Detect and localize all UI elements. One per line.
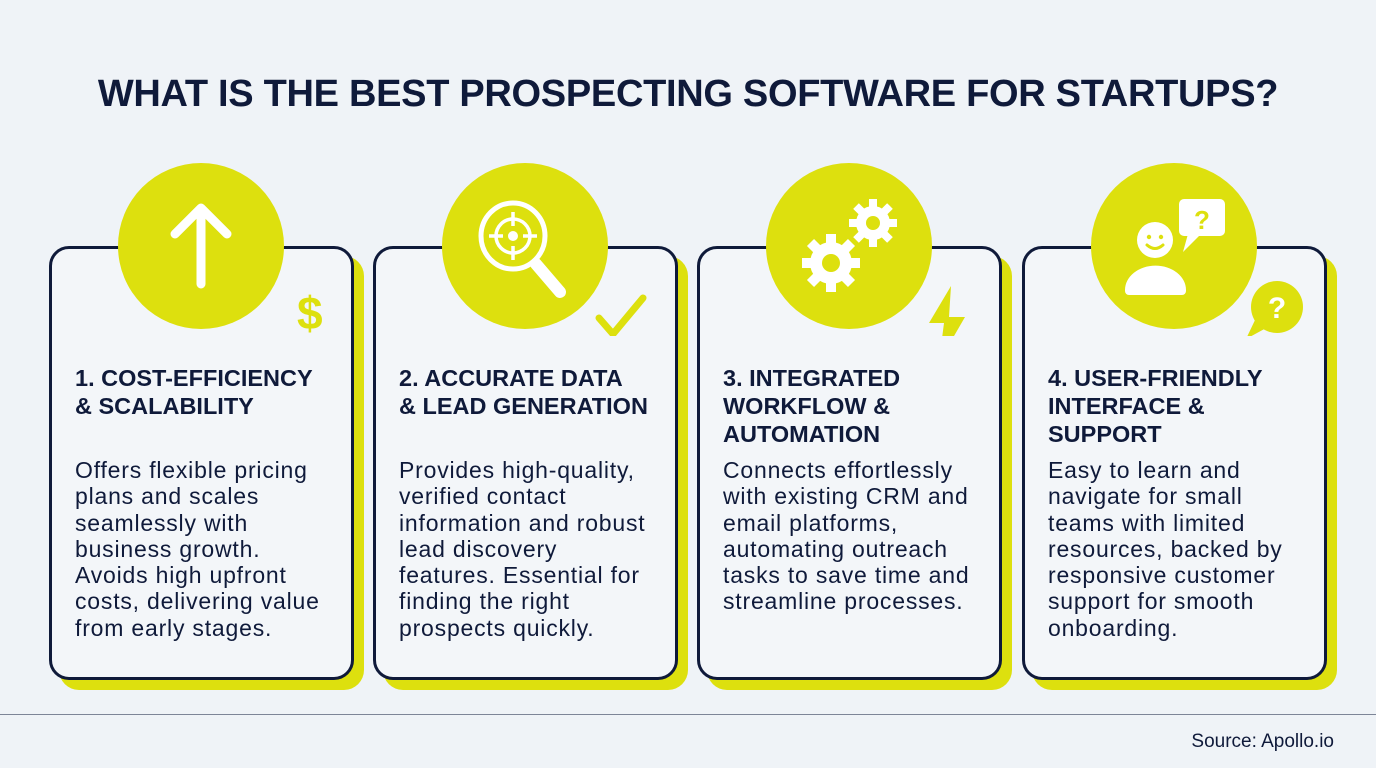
heading: 2. ACCURATE DATA xyxy=(399,365,623,391)
text block xyxy=(75,457,320,641)
text block: resources, backed by xyxy=(1048,536,1283,562)
heading xyxy=(75,365,313,419)
title: WHAT IS THE BEST PROSPECTING SOFTWARE FOR STARTUPS? xyxy=(98,73,1278,115)
text block: information and robust xyxy=(399,510,645,536)
text block: from early stages. xyxy=(75,615,272,641)
text block: Easy to learn and xyxy=(1048,457,1241,483)
text block: with existing CRM and xyxy=(723,483,969,509)
heading: 1. COST-EFFICIENCY xyxy=(75,365,313,391)
panel: accurate data xyxy=(373,163,688,690)
panel: workflow xyxy=(697,163,1012,690)
text block: navigate for small xyxy=(1048,483,1243,509)
text block: plans and scales xyxy=(75,483,259,509)
text block: prospects quickly. xyxy=(399,615,594,641)
text block: onboarding. xyxy=(1048,615,1178,641)
icon: user with question bubbles: ? xyxy=(1194,205,1210,235)
heading: SUPPORT xyxy=(1048,421,1162,447)
text block: Connects effortlessly xyxy=(723,457,953,483)
text block: Provides high-quality, xyxy=(399,457,635,483)
text block: responsive customer xyxy=(1048,562,1275,588)
text block: verified contact xyxy=(399,483,566,509)
icon: user with question bubbles xyxy=(1125,199,1303,336)
icon: magnifier with target and check xyxy=(478,200,646,336)
heading: INTERFACE & xyxy=(1048,393,1205,419)
heading: AUTOMATION xyxy=(723,421,880,447)
icon: user with question bubbles: ? xyxy=(1268,292,1286,325)
text block: support for smooth xyxy=(1048,588,1254,614)
icon: user circle xyxy=(1091,163,1257,329)
heading: & LEAD GENERATION xyxy=(399,393,648,419)
text block: Offers flexible pricing xyxy=(75,457,308,483)
text block: lead discovery xyxy=(399,536,557,562)
text block: finding the right xyxy=(399,588,570,614)
panel: cost-efficiency xyxy=(49,163,364,690)
icon: gears circle xyxy=(766,163,932,329)
text block: seamlessly with xyxy=(75,510,248,536)
text block: automating outreach xyxy=(723,536,948,562)
heading: & SCALABILITY xyxy=(75,393,254,419)
heading: WORKFLOW & xyxy=(723,393,890,419)
text block: features. Essential for xyxy=(399,562,640,588)
icon: magnifier circle xyxy=(442,163,608,329)
heading xyxy=(723,365,900,447)
text block: business growth. xyxy=(75,536,260,562)
text block xyxy=(723,457,969,614)
panel: user-friendly xyxy=(1022,163,1337,690)
icon: gears and bolt xyxy=(802,199,965,336)
heading: 3. INTEGRATED xyxy=(723,365,900,391)
icon: up arrow circle xyxy=(118,163,284,329)
text block: email platforms, xyxy=(723,510,898,536)
text block: streamline processes. xyxy=(723,588,964,614)
text block: costs, delivering value xyxy=(75,588,320,614)
heading xyxy=(1048,365,1263,447)
heading xyxy=(399,365,648,419)
heading: 4. USER-FRIENDLY xyxy=(1048,365,1263,391)
source: Source: Apollo.io xyxy=(1191,731,1334,752)
text block xyxy=(399,457,645,641)
text block: Avoids high upfront xyxy=(75,562,287,588)
text block: tasks to save time and xyxy=(723,562,969,588)
text block: teams with limited xyxy=(1048,510,1245,536)
icon: arrow and dollar xyxy=(170,204,323,336)
text block xyxy=(1048,457,1283,641)
